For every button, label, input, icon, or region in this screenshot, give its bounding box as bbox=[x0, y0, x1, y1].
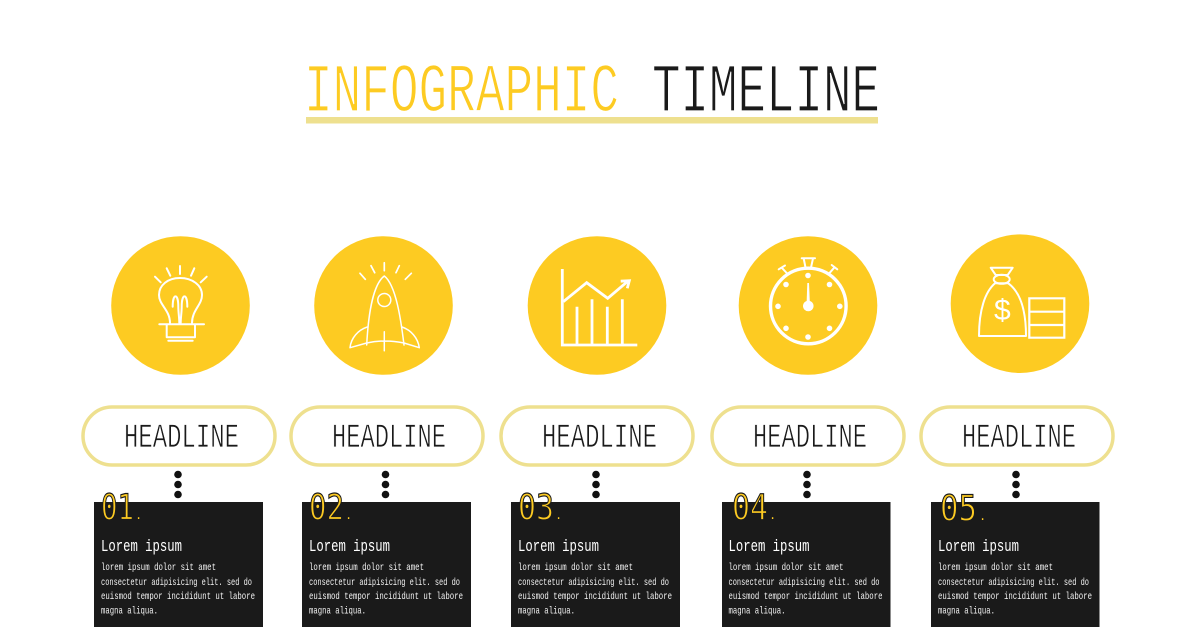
text card 2: magna aliqua. bbox=[309, 606, 366, 618]
text card 3: consectetur adipisicing elit. sed do bbox=[518, 577, 669, 589]
connector dots 4 bbox=[803, 471, 811, 498]
step 2: launch bbox=[291, 236, 483, 627]
connector dots 3 bbox=[592, 471, 600, 498]
text card 3 bbox=[511, 488, 680, 627]
text card 5: . bbox=[979, 510, 986, 524]
text card 2: Lorem ipsum bbox=[309, 538, 390, 557]
text card 4: lorem ipsum dolor sit amet bbox=[728, 562, 844, 574]
text card 5: euismod tempor incididunt ut labore bbox=[938, 591, 1092, 603]
icon: money bag and coins bbox=[951, 234, 1089, 373]
text card 5: magna aliqua. bbox=[938, 606, 995, 618]
step 4: time bbox=[712, 236, 904, 627]
text card 5 bbox=[931, 488, 1100, 627]
text card 2: lorem ipsum dolor sit amet bbox=[309, 562, 424, 574]
headline pill 2: HEADLINE bbox=[332, 420, 446, 458]
text card 1: magna aliqua. bbox=[101, 606, 158, 618]
text card 3: . bbox=[555, 509, 562, 523]
text card 3: euismod tempor incididunt ut labore bbox=[518, 591, 672, 603]
headline pill 5: HEADLINE bbox=[962, 420, 1076, 458]
text card 3: Lorem ipsum bbox=[518, 538, 599, 557]
text card 2: euismod tempor incididunt ut labore bbox=[309, 591, 463, 603]
text card 3: magna aliqua. bbox=[518, 606, 575, 618]
headline pill 1 bbox=[83, 407, 275, 465]
connector dots 1 bbox=[174, 471, 182, 498]
headline pill 1: HEADLINE bbox=[124, 420, 239, 458]
icon: stopwatch bbox=[739, 236, 877, 375]
text card 4 bbox=[722, 488, 890, 627]
step 5: money bbox=[921, 234, 1113, 627]
icon: light bulb bbox=[111, 236, 250, 375]
headline pill 5 bbox=[921, 407, 1113, 465]
text card 4: Lorem ipsum bbox=[728, 538, 810, 557]
text card 1: euismod tempor incididunt ut labore bbox=[101, 591, 255, 603]
headline pill 3 bbox=[501, 407, 693, 465]
text card 1: consectetur adipisicing elit. sed do bbox=[101, 577, 252, 589]
text card 1 bbox=[94, 488, 263, 627]
text card 1: Lorem ipsum bbox=[101, 538, 182, 557]
text card 2 bbox=[302, 488, 471, 627]
text card 2: consectetur adipisicing elit. sed do bbox=[309, 577, 460, 589]
connector dots 5 bbox=[1012, 471, 1020, 498]
text card 4: euismod tempor incididunt ut labore bbox=[728, 591, 882, 603]
text card 4: . bbox=[769, 509, 776, 523]
text card 1: lorem ipsum dolor sit amet bbox=[101, 562, 216, 574]
headline pill 4 bbox=[712, 407, 904, 465]
title: INFOGRAPHIC bbox=[304, 54, 619, 132]
text card 5: consectetur adipisicing elit. sed do bbox=[938, 577, 1089, 589]
text card 4: consectetur adipisicing elit. sed do bbox=[728, 577, 880, 589]
text card 5: 05 bbox=[940, 488, 977, 530]
text card 4: 04 bbox=[732, 488, 768, 528]
title: TIMELINE bbox=[652, 54, 880, 132]
text card 1: . bbox=[135, 509, 142, 523]
text card 1: 01 bbox=[101, 488, 134, 528]
step 1: idea bbox=[83, 236, 275, 627]
text card 2: . bbox=[345, 509, 352, 523]
text card 3: 03 bbox=[518, 488, 554, 528]
headline pill 2 bbox=[291, 407, 483, 465]
headline pill 4: HEADLINE bbox=[753, 420, 867, 458]
icon: money bag and coins: $ bbox=[994, 294, 1011, 327]
connector dots 2 bbox=[382, 471, 389, 498]
step 3: growth bbox=[501, 236, 693, 627]
text card 4: magna aliqua. bbox=[728, 606, 786, 618]
text card 5: lorem ipsum dolor sit amet bbox=[938, 562, 1053, 574]
text card 5: Lorem ipsum bbox=[938, 538, 1019, 557]
text card 3: lorem ipsum dolor sit amet bbox=[518, 562, 633, 574]
icon: growth chart bbox=[528, 236, 666, 375]
headline pill 3: HEADLINE bbox=[542, 420, 657, 458]
icon: rocket bbox=[314, 236, 453, 375]
text card 2: 02 bbox=[309, 488, 344, 528]
